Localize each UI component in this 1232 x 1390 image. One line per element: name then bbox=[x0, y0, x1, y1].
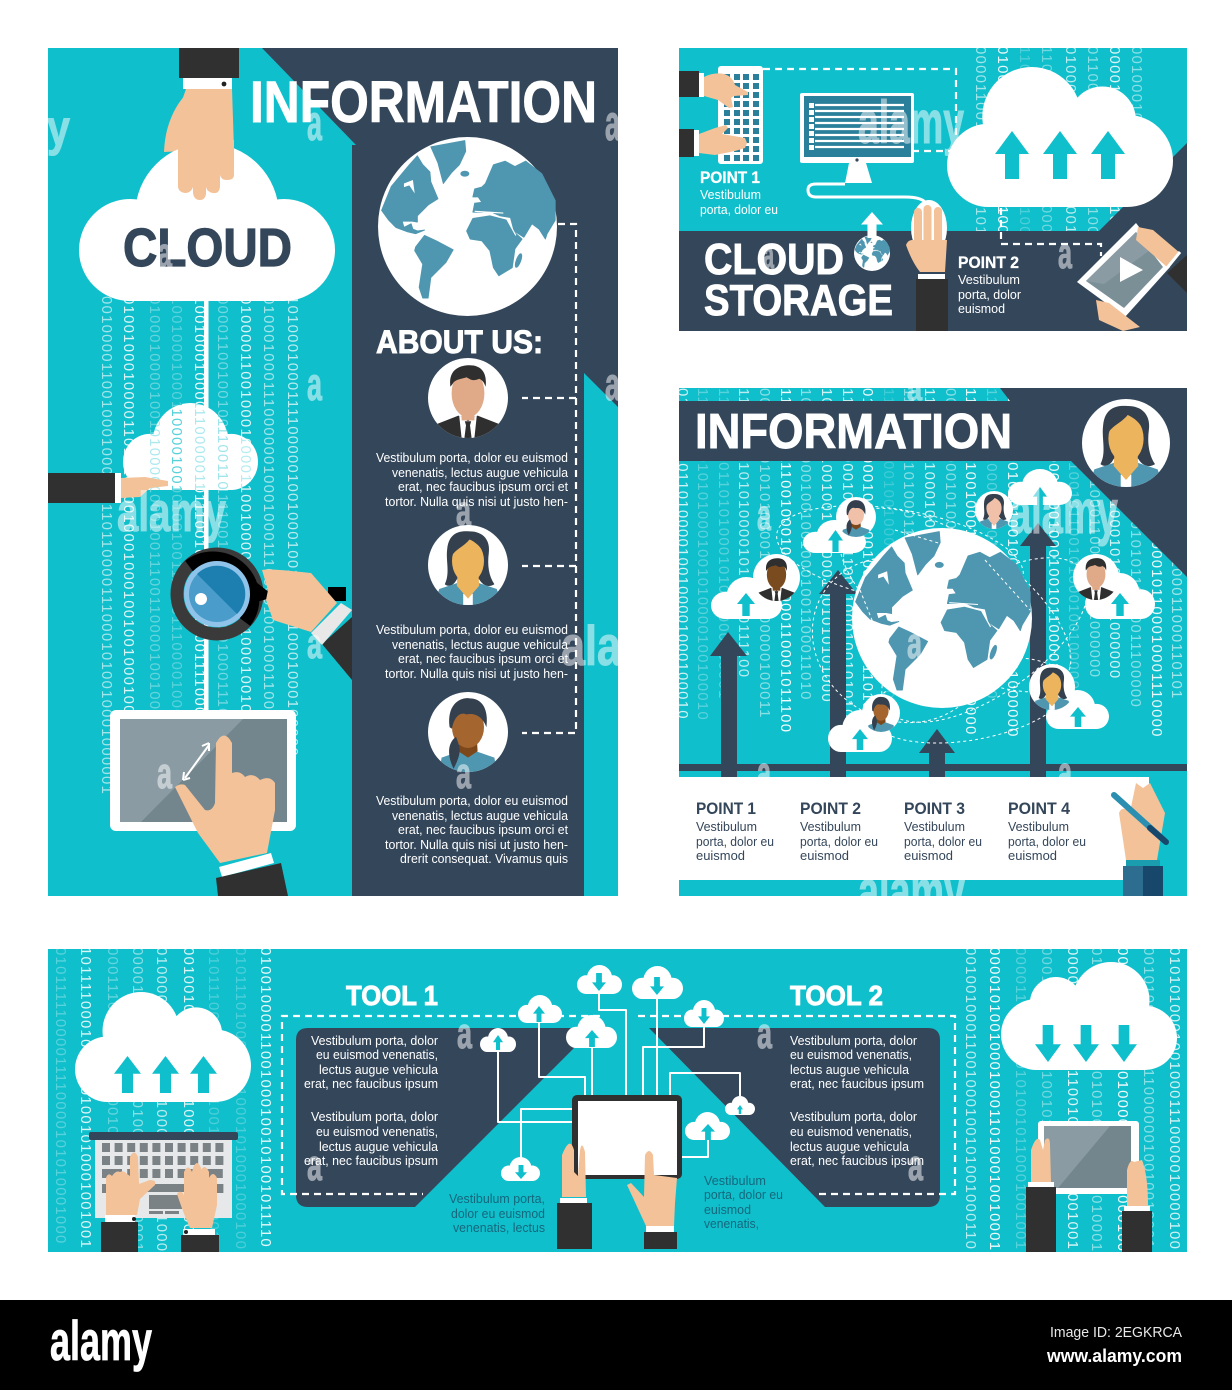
binary data columns: 1110001010100011001011010010001 bbox=[900, 388, 917, 679]
avatar: woman with ponytail bbox=[428, 692, 508, 772]
binary data columns: 00100010000100100010001 bbox=[1128, 46, 1145, 265]
cloud user: woman lower right bbox=[1029, 664, 1109, 729]
cloud user: man right bbox=[1073, 554, 1155, 619]
point 3: POINT 3 bbox=[904, 799, 965, 818]
binary data columns: 1110010001010100100100110100001000000 bbox=[1004, 388, 1021, 738]
ring highlight bbox=[189, 558, 253, 622]
tool 2 text: lectus augue vehicula bbox=[790, 1063, 909, 1077]
tool 2 text bbox=[790, 1034, 924, 1168]
tablet in hands bbox=[557, 1095, 682, 1249]
small clouds bbox=[480, 965, 755, 1181]
heading: about us: ABOUT US: bbox=[376, 324, 543, 360]
watermark marks: alamy bbox=[1010, 478, 1118, 547]
watermark marks bbox=[757, 374, 1118, 925]
watermark marks: a bbox=[307, 95, 323, 151]
hands on laptop bbox=[101, 1152, 219, 1252]
binary columns right bbox=[962, 947, 1183, 1252]
dashed connectors bbox=[522, 224, 576, 733]
watermark marks: ala bbox=[561, 614, 622, 677]
binary data columns: 1110001010101000010101010111100 bbox=[735, 388, 752, 678]
watermark marks: a bbox=[307, 1141, 322, 1190]
upload cloud bbox=[75, 992, 251, 1102]
globe bbox=[378, 137, 557, 316]
small data cloud: 10001000001110 bbox=[146, 400, 163, 531]
globe bbox=[852, 528, 1032, 708]
watermark marks bbox=[47, 95, 622, 798]
watermark marks: a bbox=[907, 374, 922, 407]
watermark marks: alamy bbox=[858, 89, 964, 156]
large cloud bbox=[79, 143, 335, 301]
monitor bbox=[800, 93, 914, 183]
binary data columns: 00001100100010000101000 bbox=[972, 46, 989, 264]
point 2: POINT 2 bbox=[800, 799, 861, 818]
white points panel bbox=[679, 777, 1149, 880]
point 2 text: Vestibulum bbox=[958, 273, 1020, 287]
binary data columns: 1110001010001001010101110001000 bbox=[921, 388, 938, 679]
growth arrows bbox=[710, 523, 1056, 777]
tool 2 text: erat, nec faucibus ipsum bbox=[790, 1077, 924, 1091]
about text 2: Vestibulum porta, dolor eu euismod bbox=[376, 623, 568, 637]
watermark marks: a bbox=[456, 749, 471, 798]
cuff button bbox=[222, 82, 226, 86]
binary columns right: 00001010010001000110100010010001 bbox=[986, 947, 1003, 1251]
binary columns left: 00100100010001001000100100010010 bbox=[180, 947, 197, 1252]
double arrow bbox=[183, 743, 209, 780]
point 1: Vestibulum bbox=[696, 820, 757, 834]
cuff bbox=[219, 853, 274, 877]
laptop bbox=[89, 1132, 238, 1218]
small data cloud: 11000010010011 bbox=[168, 400, 185, 531]
point 2 text bbox=[958, 253, 1021, 316]
watermark marks: a bbox=[307, 620, 322, 667]
binary columns left: 01000010010001001000100100101000 bbox=[153, 947, 170, 1252]
hand on tablet bbox=[175, 736, 288, 896]
about text 3: Vestibulum porta, dolor eu euismod bbox=[376, 794, 568, 808]
cuff bbox=[311, 603, 352, 645]
cloud user: woman top right bbox=[975, 469, 1072, 529]
sleeve bbox=[48, 473, 115, 503]
binary data columns: 1000011001011000101010111000000 bbox=[1106, 388, 1123, 679]
about text 3: tortor. Nulla quis nisi ut justo hen- bbox=[385, 838, 568, 852]
point 1: porta, dolor eu bbox=[696, 835, 774, 849]
dashed network orbits bbox=[769, 473, 1115, 757]
title: cloud: CLOUD bbox=[123, 218, 292, 278]
watermark marks: a bbox=[757, 1009, 772, 1058]
point 2: Vestibulum bbox=[800, 820, 861, 834]
binary data columns: 01100100010000100100010 bbox=[1084, 46, 1101, 264]
panel: cloud storage banner bbox=[679, 46, 1187, 331]
tablet with play button and hands bbox=[1077, 223, 1187, 331]
binary data columns: 1001000100010010111000100100111000111000010001000 bbox=[168, 296, 185, 757]
network overlay lines bbox=[860, 530, 1030, 640]
cloud user: woman ponytail bbox=[803, 497, 876, 553]
tool 1 text: erat, nec faucibus ipsum bbox=[304, 1077, 438, 1091]
tool 1 text: lectus augue vehicula bbox=[319, 1140, 438, 1154]
watermark marks: a bbox=[908, 1141, 923, 1190]
title: cloud storage: STORAGE bbox=[704, 276, 893, 325]
caption right: porta, dolor eu bbox=[704, 1188, 783, 1202]
watermark marks: a bbox=[907, 619, 922, 668]
point 2 text: euismod bbox=[958, 302, 1005, 316]
binary columns right: 01001001000100101001001000010001 bbox=[1088, 947, 1105, 1252]
sleeve bbox=[216, 863, 288, 896]
ring joint bbox=[257, 583, 268, 601]
watermark marks: a bbox=[605, 95, 621, 151]
binary data columns: 1110011000100011000101011000000 bbox=[1086, 388, 1103, 678]
point 3: euismod bbox=[904, 849, 953, 863]
mouse and hand bbox=[906, 200, 948, 331]
point 1 text: porta, dolor eu bbox=[700, 203, 778, 217]
about text 3: venenatis, lectus augue vehicula bbox=[392, 809, 568, 823]
binary data columns: 11000100011100001000100 bbox=[1038, 46, 1055, 262]
fingers bbox=[178, 140, 234, 200]
about text 1 bbox=[376, 451, 569, 509]
dark background shape bbox=[262, 48, 618, 896]
binary columns right: 00001010001011100100010010001001 bbox=[1064, 947, 1081, 1250]
point 2: euismod bbox=[800, 849, 849, 863]
binary data columns: 01000010001001000100001001000110101 bbox=[859, 388, 876, 721]
binary columns left: 01011101000010010001010001000100 bbox=[232, 947, 249, 1250]
about text 1: Vestibulum porta, dolor eu euismod bbox=[376, 451, 568, 465]
cuff bbox=[115, 473, 121, 503]
point 1 text bbox=[700, 168, 778, 217]
tool 1 text: lectus augue vehicula bbox=[319, 1063, 438, 1077]
caption left bbox=[449, 1192, 545, 1235]
download cloud bbox=[1001, 962, 1177, 1070]
binary data columns: 11000100010010000100100 bbox=[1016, 46, 1033, 264]
palm bbox=[178, 89, 234, 150]
watermark marks: alamy bbox=[117, 480, 226, 543]
caption left: dolor eu euismod bbox=[451, 1207, 545, 1221]
binary data columns: 01000011011010000100100001000100010 bbox=[674, 388, 691, 720]
tool 2 text: eu euismod venenatis, bbox=[790, 1048, 912, 1062]
point 4 bbox=[1008, 799, 1086, 863]
keyboard bbox=[718, 66, 763, 164]
about text 2: erat, nec faucibus ipsum orci et bbox=[398, 652, 569, 666]
binary data columns: 000101100010100101101000100010000 bbox=[942, 388, 959, 701]
caption right: Vestibulum bbox=[704, 1174, 766, 1188]
panel background bbox=[48, 949, 1187, 1252]
binary data columns: 0100001100100010000110010000100100010001001000100 bbox=[237, 296, 254, 761]
point 3: Vestibulum bbox=[904, 820, 965, 834]
about text 1: erat, nec faucibus ipsum orci et bbox=[398, 480, 569, 494]
point 2: porta, dolor eu bbox=[800, 835, 878, 849]
panel background bbox=[679, 388, 1187, 896]
title: information: INFORMATION bbox=[250, 70, 597, 135]
sleeve bbox=[179, 48, 239, 78]
binary columns left: 01001000011001000100101001011110 bbox=[257, 947, 274, 1248]
hands holding tablet bbox=[1026, 1138, 1152, 1252]
tool 2 text: Vestibulum porta, dolor bbox=[790, 1110, 917, 1124]
binary data columns: 0000110010010001001011110010000110000100011100100 bbox=[214, 296, 231, 756]
point 4: Vestibulum bbox=[1008, 820, 1069, 834]
point 1 bbox=[696, 799, 774, 863]
growth arrow baseline bbox=[679, 764, 1187, 771]
panel background bbox=[48, 48, 618, 896]
dark header band bbox=[679, 388, 1187, 577]
hand with pen bbox=[1114, 783, 1166, 896]
watermark marks: a bbox=[157, 749, 172, 798]
cuff bbox=[183, 78, 232, 89]
binary data columns: 111000101001011001010001001000000 bbox=[1065, 388, 1082, 700]
watermark marks: a bbox=[1058, 748, 1072, 797]
point 2 bbox=[800, 799, 878, 863]
tool 1 text bbox=[304, 1034, 438, 1168]
point 4: POINT 4 bbox=[1008, 799, 1071, 818]
dark box left bbox=[296, 1028, 594, 1207]
binary columns left bbox=[52, 947, 274, 1252]
ring bbox=[177, 554, 257, 634]
tool 1 text: eu euismod venenatis, bbox=[316, 1048, 438, 1062]
avatar: woman header bbox=[1082, 399, 1170, 487]
binary data columns: 0100100010000110101000010001000100100100010001000 bbox=[120, 296, 137, 762]
magnifying glass bbox=[177, 554, 346, 634]
binary data columns: 110001010001001010010001011100000 bbox=[983, 388, 1000, 700]
hand thumb behind cloud bbox=[164, 97, 184, 152]
watermark marks: a bbox=[456, 487, 471, 534]
watermark marks bbox=[307, 1009, 923, 1190]
watermark marks: a bbox=[457, 1009, 472, 1058]
binary columns right: 00100100011001000100101001000110 bbox=[962, 947, 979, 1250]
about text 1: tortor. Nulla quis nisi ut justo hen- bbox=[385, 495, 568, 509]
heading: tool 1: TOOL 1 bbox=[346, 980, 438, 1011]
caption right: euismod bbox=[704, 1203, 751, 1217]
tool 1 text: Vestibulum porta, dolor bbox=[311, 1034, 438, 1048]
about text 2: tortor. Nulla quis nisi ut justo hen- bbox=[385, 667, 568, 681]
dashed connector 2 bbox=[1001, 208, 1101, 256]
binary data columns: 11001010001000100110011000100101010 bbox=[839, 388, 856, 719]
panel: tools banner bbox=[48, 947, 1187, 1252]
binary columns left: 01011111000011110000101010001000 bbox=[52, 947, 69, 1245]
binary columns right: 00101001000111100000010010010001 bbox=[1140, 947, 1157, 1249]
watermark marks: a bbox=[763, 235, 774, 277]
dark box right bbox=[649, 1028, 940, 1207]
about text 3: erat, nec faucibus ipsum orci et bbox=[398, 823, 569, 837]
binary data columns: 1000100010101001000101100010001110000 bbox=[1148, 388, 1165, 738]
point 1: POINT 1 bbox=[696, 799, 756, 818]
dashed connectors bbox=[763, 69, 956, 151]
title: cloud storage bbox=[704, 235, 893, 325]
point 2 text: porta, dolor bbox=[958, 288, 1021, 302]
binary data columns bbox=[972, 46, 1145, 265]
binary data columns: 0100010000100111000010001001110011000010010001000 bbox=[146, 296, 163, 758]
tool 2 text: eu euismod venenatis, bbox=[790, 1125, 912, 1139]
sleeve bbox=[322, 617, 352, 680]
tool 1 text: erat, nec faucibus ipsum bbox=[304, 1154, 438, 1168]
binary data columns: 111000010110101000101001000000001 bbox=[715, 388, 732, 700]
watermark marks bbox=[763, 89, 1072, 278]
tool 2 text: Vestibulum porta, dolor bbox=[790, 1034, 917, 1048]
cable bbox=[808, 184, 927, 205]
watermark marks: alamy bbox=[858, 858, 965, 925]
about text 2 bbox=[376, 623, 569, 681]
image id: Image ID: 2EGKRCA bbox=[1050, 1324, 1182, 1341]
title: information: INFORMATION bbox=[695, 405, 1012, 459]
watermark marks: a bbox=[1058, 229, 1072, 278]
hand holding magnifier bbox=[262, 569, 352, 680]
about text 1: venenatis, lectus augue vehicula bbox=[392, 466, 568, 480]
binary data columns: 00001000101010000100011100000100011 bbox=[756, 388, 773, 719]
small data cloud: 01111001100010 bbox=[214, 400, 231, 529]
binary data columns: 0100110000100010001001011000010011 bbox=[1045, 388, 1062, 709]
watermark marks: a bbox=[157, 229, 172, 276]
small data cloud bbox=[123, 403, 258, 490]
point 2 text: POINT 2 bbox=[958, 253, 1019, 272]
small data cloud: 11100000111000 bbox=[191, 400, 208, 529]
binary columns right: 00100000100100100001001001000100 bbox=[1114, 947, 1131, 1252]
binary data columns: 00001000100011100100001 bbox=[1106, 46, 1123, 263]
binary data columns: 110001110010010001001001000100100 bbox=[880, 388, 897, 700]
binary columns left: 00011101001000100010001000100100 bbox=[104, 947, 121, 1250]
binary data columns: 001010001011001000100011000110101 bbox=[1168, 388, 1185, 700]
panel background bbox=[679, 48, 1187, 331]
binary data columns: 01000010001001110001000 bbox=[1062, 46, 1079, 263]
binary columns left: 00001000010010000100100010010001 bbox=[129, 947, 146, 1252]
binary data columns: 1001000100001011100101110010010001100011110000000 bbox=[191, 296, 208, 755]
dark band bbox=[679, 143, 1187, 331]
hand bbox=[262, 569, 337, 632]
binary columns right: 00010001001001001011000101001000 bbox=[1038, 947, 1055, 1251]
binary data columns: 1010001000111100000100100010011100110001000100000 bbox=[284, 296, 301, 757]
point 1 text: POINT 1 bbox=[700, 168, 760, 187]
title: cloud storage: CLOUD bbox=[704, 235, 844, 284]
watermark marks: a bbox=[307, 358, 322, 410]
hand bbox=[121, 477, 168, 498]
binary data columns: 01001000100001110100010 bbox=[994, 46, 1011, 263]
avatar: man bbox=[428, 358, 508, 438]
tablet right bbox=[1038, 1121, 1139, 1194]
cloud user: man dark skin bbox=[711, 554, 800, 619]
footer logo: alamy bbox=[50, 1309, 152, 1372]
binary data columns bbox=[674, 388, 1185, 738]
binary data columns: 1100011010010001100010011101000000000 bbox=[962, 388, 979, 736]
binary columns right: 01010100010010001110000010000100 bbox=[1166, 947, 1183, 1250]
tool 1 text: eu euismod venenatis, bbox=[316, 1125, 438, 1139]
tablet bbox=[110, 710, 296, 831]
tool 2 text: erat, nec faucibus ipsum bbox=[790, 1154, 924, 1168]
watermark marks: y bbox=[47, 100, 70, 156]
heading: tool 2: TOOL 2 bbox=[790, 980, 883, 1011]
caption left: venenatis, lectus bbox=[453, 1221, 545, 1235]
small data cloud: 10111000110001 bbox=[237, 400, 254, 530]
about text 2: venenatis, lectus augue vehicula bbox=[392, 638, 568, 652]
hand bbox=[175, 736, 275, 863]
cloud user: woman bottom bbox=[828, 694, 900, 752]
watermark marks: a bbox=[757, 491, 771, 540]
tool 2 text: lectus augue vehicula bbox=[790, 1140, 909, 1154]
binary data columns: 11000100101010001001010000100100010 bbox=[694, 388, 711, 721]
icon: globe with upload arrow bbox=[854, 212, 890, 271]
panel: information about us poster bbox=[47, 48, 622, 896]
caption right bbox=[704, 1174, 783, 1231]
point 1: euismod bbox=[696, 849, 745, 863]
about text 3 bbox=[376, 794, 569, 866]
footer background bbox=[0, 1300, 1232, 1390]
tool 1 text: Vestibulum porta, dolor bbox=[311, 1110, 438, 1124]
about text 3: drerit consequat. Vivamus quis bbox=[400, 852, 568, 866]
binary data columns: 100100100010010010001001100011010 bbox=[797, 388, 814, 701]
watermark marks: a bbox=[605, 358, 620, 410]
panel: information network poster bbox=[674, 374, 1187, 925]
binary data columns: 0000100011010001010110100011100000 bbox=[1127, 388, 1144, 708]
binary data columns: 0100010001110000001000100011100001001000110010001 bbox=[260, 296, 277, 758]
caption left: Vestibulum porta, bbox=[449, 1192, 545, 1206]
hand pointing at small cloud bbox=[48, 473, 168, 503]
avatar: woman bbox=[428, 525, 508, 605]
binary data columns: 1100000111001000100011000110001011100 bbox=[777, 388, 794, 733]
point 4: porta, dolor eu bbox=[1008, 835, 1086, 849]
point 1 text: Vestibulum bbox=[700, 188, 761, 202]
upload cloud bbox=[947, 67, 1173, 207]
dashed frames bbox=[282, 1016, 955, 1194]
binary data columns bbox=[98, 296, 301, 795]
point 3: porta, dolor eu bbox=[904, 835, 982, 849]
hand holding cloud bbox=[178, 48, 239, 200]
point 4: euismod bbox=[1008, 849, 1057, 863]
watermark marks: a bbox=[757, 748, 771, 797]
website: www.alamy.com bbox=[1046, 1346, 1182, 1366]
circuit lines bbox=[498, 990, 740, 1158]
handle bbox=[328, 587, 346, 601]
binary columns left: 10111100010000101001010001001001 bbox=[77, 947, 94, 1249]
footer bar bbox=[0, 1300, 1232, 1390]
connector line bbox=[204, 300, 208, 712]
binary columns left: 01011100010010001001001000100010 bbox=[205, 947, 222, 1250]
hands on keyboard bbox=[679, 71, 748, 157]
caption right: venenatis, bbox=[704, 1217, 759, 1231]
binary data columns: 100101010010010100001001010101000 bbox=[818, 388, 835, 703]
point 3 bbox=[904, 799, 982, 863]
binary data columns: 00100001100100010001011101100001110001010010001000001 bbox=[98, 296, 115, 795]
lens bbox=[184, 561, 250, 627]
binary columns right: 00001101001001010010110001001001 bbox=[1012, 947, 1029, 1250]
